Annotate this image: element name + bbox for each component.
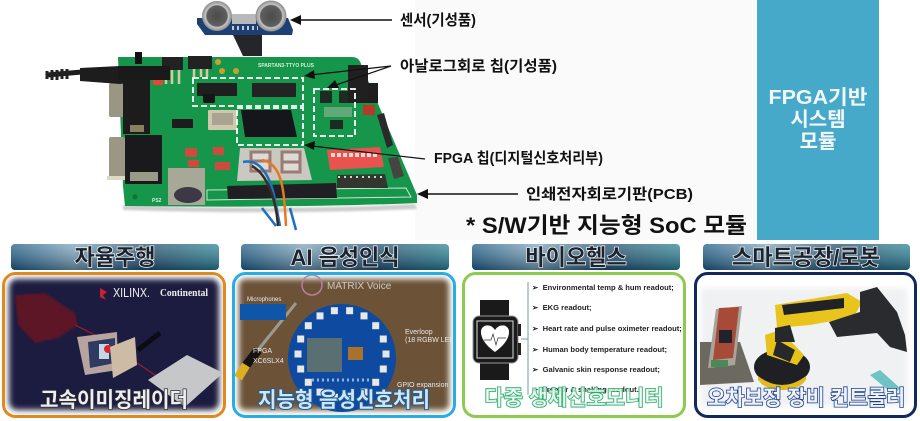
analog chips bbox=[320, 91, 352, 129]
panel: intelligent speech signal processing: (18 RGBW LED) bbox=[405, 337, 457, 344]
logos bbox=[100, 288, 208, 300]
heading: AI speech recognition: AI 음성인식 bbox=[290, 245, 400, 270]
heading: autonomous driving: 자율주행 bbox=[75, 245, 155, 270]
label: analog chip: 아날로그회로 칩(기성품) bbox=[400, 58, 557, 75]
list: biosignal readouts: ➢ Environmental temp & hum readout; bbox=[532, 283, 674, 292]
label: PCB: 인쇄전자회로기판(PCB) bbox=[526, 186, 693, 203]
memory chips bbox=[172, 83, 296, 130]
list: biosignal readouts: ➢ EKG readout; bbox=[532, 303, 592, 312]
PCB: PS2 bbox=[152, 198, 162, 204]
image sensor module bbox=[77, 332, 160, 378]
push buttons bbox=[185, 147, 230, 170]
panel: high-speed imaging radar: 고속이미징레이더 bbox=[40, 389, 188, 412]
audio plug cable bbox=[47, 66, 170, 84]
label: FPGA chip: FPGA 칩(디지털신호처리부) bbox=[434, 150, 603, 167]
red controller board bbox=[708, 306, 742, 368]
robot base bbox=[758, 376, 805, 390]
panel: intelligent speech signal processing: Microphones bbox=[247, 297, 281, 303]
heading: biohealth bbox=[472, 244, 680, 270]
sensor module bbox=[197, 0, 293, 56]
arrow: analog chips bbox=[304, 66, 391, 88]
heading: smart factory and robot: 스마트공장/로봇 bbox=[732, 245, 880, 270]
arrow: PCB bbox=[417, 189, 518, 199]
FPGA chip bbox=[241, 110, 297, 137]
gray base bbox=[700, 342, 754, 385]
top headers and switch bbox=[135, 52, 239, 85]
label: SoC module: * S/W기반 지능형 SoC 모듈 bbox=[466, 213, 747, 238]
icon: smartwatch with heart bbox=[473, 300, 521, 380]
panel: high-speed imaging radar bbox=[4, 274, 224, 416]
background tint bbox=[415, 0, 757, 240]
dashed outline: analog chips top bbox=[193, 78, 303, 106]
bracket line bbox=[521, 282, 528, 395]
panel: intelligent speech signal processing: Everloop bbox=[405, 329, 433, 336]
blue circular board bbox=[288, 304, 396, 412]
list: biosignal readouts bbox=[532, 283, 682, 394]
panel: error correction equipment controller: 오차보정 장비 컨트롤러 bbox=[707, 387, 905, 410]
photo: FPGA board with sensor bbox=[47, 0, 417, 230]
panel: FPGA system module: 시스템 bbox=[790, 108, 846, 131]
PCB bbox=[118, 57, 417, 212]
panel: intelligent speech signal processing: 지능형 음성신호처리 bbox=[258, 389, 430, 412]
pin headers bbox=[227, 174, 388, 199]
processor chip bbox=[148, 355, 223, 407]
list: biosignal readouts: ➢ Tremor & shaking readout. bbox=[532, 385, 639, 394]
panel: FPGA system module: FPGA기반 bbox=[768, 86, 868, 109]
panel: intelligent speech signal processing: XC6SLX4 bbox=[253, 358, 284, 365]
PCB: SPARTAN3-TTYO PLUS bbox=[258, 63, 315, 69]
list: biosignal readouts: ➢ Galvanic skin response readout; bbox=[532, 365, 660, 374]
logos: XILINX. bbox=[113, 285, 150, 300]
red DIP switch bbox=[327, 147, 384, 170]
logos: Continental bbox=[160, 287, 208, 299]
seven segment display bbox=[237, 148, 312, 181]
panel: intelligent speech signal processing: FPGA bbox=[253, 348, 272, 355]
brand label: MATRIX Voice bbox=[327, 281, 392, 292]
icon: red wireframe car bbox=[15, 293, 78, 343]
heading: smart factory and robot bbox=[703, 244, 910, 270]
dashed outline: FPGA chip bbox=[237, 108, 303, 145]
list: biosignal readouts: ➢ Heart rate and pulse oximeter readout; bbox=[532, 324, 682, 333]
panel: multi biosignal monitor bbox=[464, 274, 684, 416]
panel: intelligent speech signal processing: GPIO expansion bbox=[397, 382, 448, 389]
list: biosignal readouts: ➢ Human body temperature readout; bbox=[532, 345, 667, 354]
jumper wires bbox=[243, 160, 296, 230]
heading: AI speech recognition bbox=[241, 244, 449, 270]
panel: multi biosignal monitor: 다중 생체신호모니터 bbox=[484, 387, 664, 410]
heading: biohealth: 바이오헬스 bbox=[525, 245, 627, 270]
dashed outline: analog chips right bbox=[314, 89, 355, 136]
panel: FPGA system module bbox=[757, 0, 879, 240]
panel: intelligent speech signal processing bbox=[234, 274, 457, 416]
right side pins and knobs bbox=[348, 65, 404, 179]
panel: error correction equipment controller bbox=[696, 274, 916, 416]
arrow: sensor bbox=[290, 15, 392, 25]
connector blocks bbox=[123, 80, 162, 184]
teal part bbox=[870, 370, 900, 395]
label: sensor: 센서(기성품) bbox=[400, 12, 476, 29]
panel: FPGA system module: 모듈 bbox=[800, 131, 836, 153]
tools bbox=[258, 303, 296, 350]
PS2 connector bbox=[168, 168, 205, 205]
D-sub connectors bbox=[107, 83, 125, 180]
arrow: FPGA chip bbox=[304, 141, 425, 159]
heading: autonomous driving bbox=[11, 244, 219, 270]
robot arm bbox=[765, 330, 804, 365]
